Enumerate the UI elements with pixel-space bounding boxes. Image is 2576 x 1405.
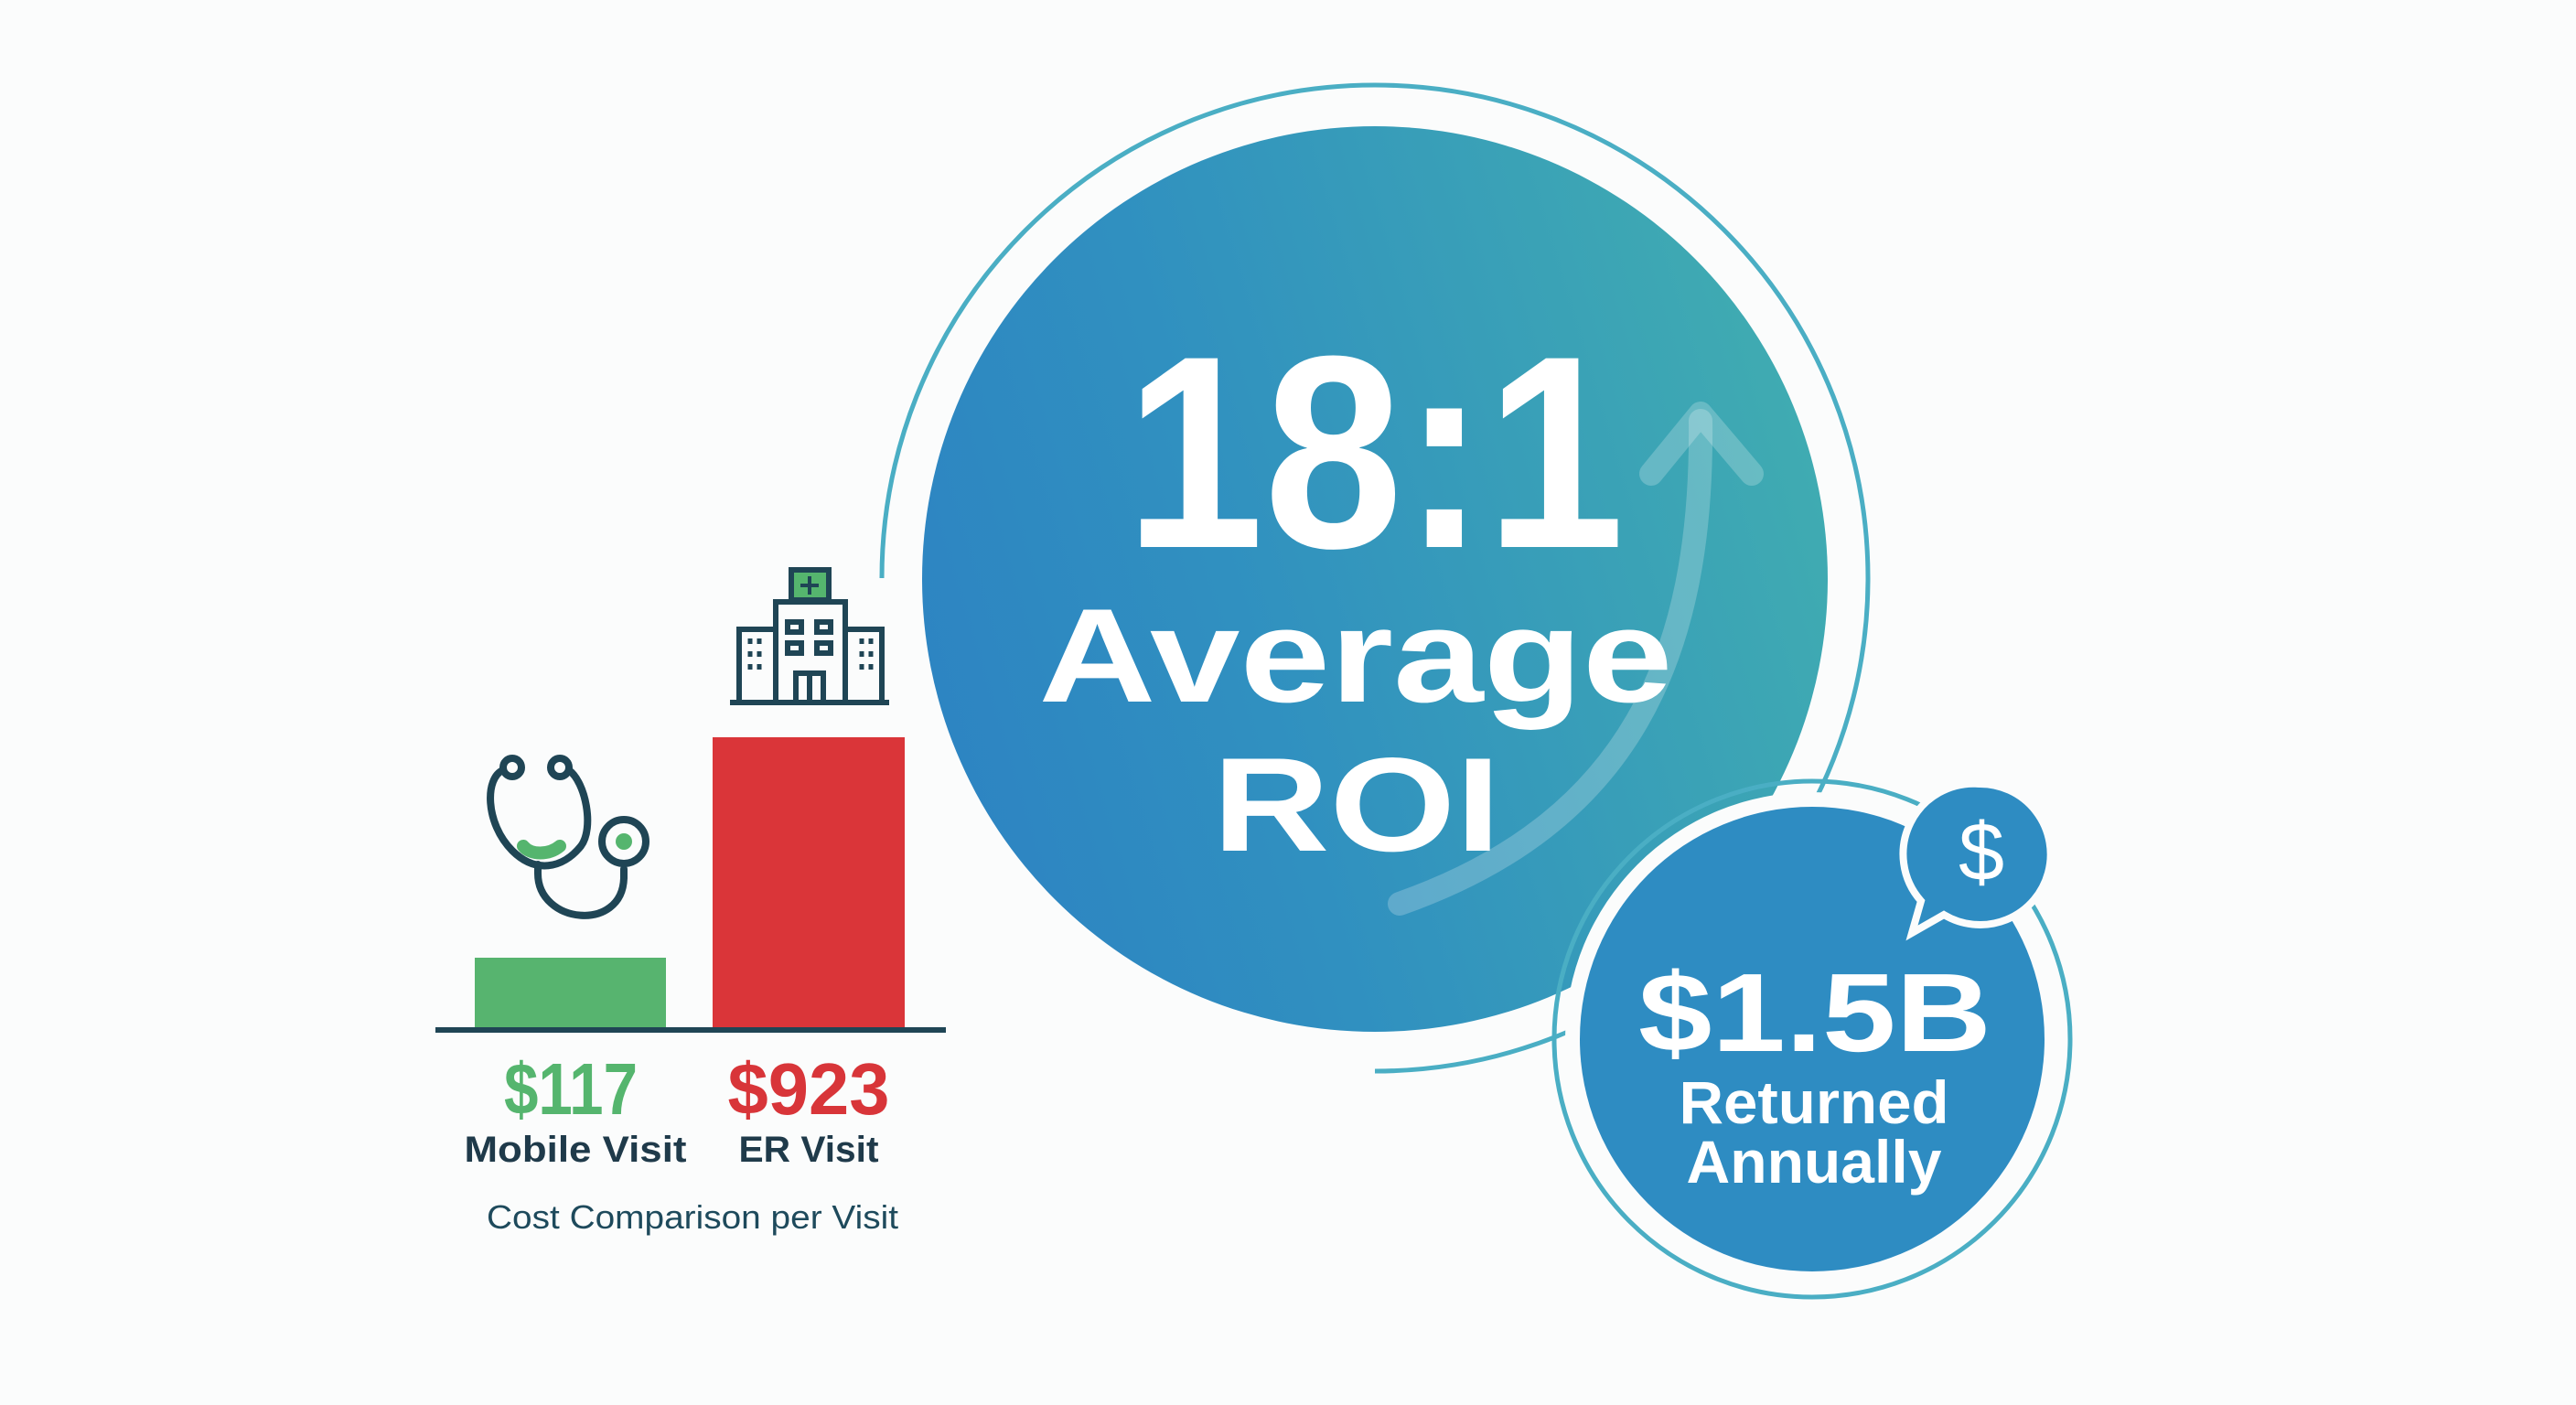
panel: ROI circle <box>882 85 1868 1071</box>
label: $923: $923 <box>728 1048 889 1130</box>
icon: dollar speech bubble <box>1903 784 2051 933</box>
icon: hospital <box>730 570 889 702</box>
text: Returned Annually: Returned <box>1680 1068 1948 1136</box>
heading: 18:1: 18:1 <box>1125 298 1625 606</box>
label: ER Visit: ER Visit <box>739 1130 878 1170</box>
icon: stethoscope <box>490 758 646 916</box>
heading: Average ROI <box>1039 581 1672 879</box>
text: Returned Annually <box>1680 1068 1948 1196</box>
panel: annual return circle <box>1554 781 2070 1297</box>
arrow: growth <box>1400 413 1752 904</box>
panel: cost comparison chart <box>435 570 946 1236</box>
bar: mobile visit <box>475 958 666 1029</box>
stat: $1.5B: $1.5B <box>1638 950 1991 1075</box>
label: $117: $117 <box>504 1048 638 1130</box>
icon: dollar speech bubble: $ <box>1959 807 2004 898</box>
ring arc <box>882 85 1868 1071</box>
heading: Average ROI: ROI <box>1213 730 1500 879</box>
heading: Average ROI: Average <box>1039 581 1672 730</box>
bar: ER visit <box>713 737 905 1029</box>
main circle <box>922 126 1828 1032</box>
text: Returned Annually: Annually <box>1687 1128 1942 1196</box>
label: Mobile Visit: Mobile Visit <box>465 1130 686 1170</box>
caption: Cost Comparison per Visit <box>487 1198 898 1236</box>
